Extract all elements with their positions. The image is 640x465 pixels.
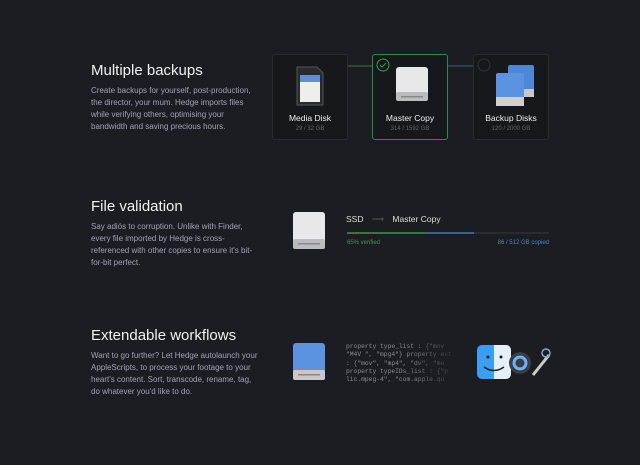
body text: Want to go further? Let Hedge autolaunch your AppleScripts, to process your footage to your heart's content. Sort, transcode, rename, tag, do whatever you'd like to do. <box>91 351 257 396</box>
section: multiple backups text <box>91 62 251 131</box>
transfer label: SSD ⟶ Master Copy <box>346 214 441 224</box>
icon: sd card <box>296 66 324 106</box>
transfer progress <box>346 214 549 246</box>
heading: File validation <box>91 198 183 215</box>
progress stats: 65% verified <box>347 240 380 246</box>
section: file validation text <box>91 198 252 267</box>
card: media disk <box>272 54 348 140</box>
heading: Extendable workflows <box>91 327 236 344</box>
card: master copy: 314 / 1592 GB <box>391 126 429 132</box>
icon: empty circle <box>478 58 490 72</box>
icon: blue drive <box>293 343 325 380</box>
icon: check <box>376 58 390 72</box>
icon: finder <box>477 345 511 379</box>
body text: Say adiós to corruption. Unlike with Finder, every file imported by Hedge is cross-referenced with other copies to ensure it's bit-for-bit perfect. <box>91 222 252 267</box>
icon: ssd drive <box>293 212 325 249</box>
card: media disk: Media Disk <box>289 113 331 123</box>
connector lines <box>348 66 473 67</box>
card: master copy <box>372 54 448 140</box>
heading: Multiple backups <box>91 62 203 79</box>
card: media disk: 29 / 32 GB <box>296 126 324 132</box>
icon: quicktime <box>509 352 531 374</box>
icon: drive <box>396 67 428 101</box>
card: master copy: Master Copy <box>386 113 434 123</box>
card: backup disks <box>473 54 549 140</box>
card: backup disks: Backup Disks <box>485 113 537 123</box>
progress bar <box>347 232 549 234</box>
body text: Create backups for yourself, post-production, the director, your mum. Hedge imports files while verifying others, optimising your bandwidth and saving precious hours. <box>91 86 251 131</box>
section: extendable workflows text <box>91 327 258 396</box>
transfer progress: 86 / 512 GB copied <box>498 240 549 246</box>
icons: apps <box>477 345 551 379</box>
card: backup disks: 120 / 2000 GB <box>492 126 530 132</box>
code snippet: property type_list : {"mov "M4V ", "mpg4"} property ext : {"mov", "mp4", "dv", "mo property typeIDs_list : {"p lic.mpeg-4", "com.apple.qu <box>346 343 452 383</box>
icon: drives <box>496 65 534 106</box>
icon: script editor <box>532 348 551 376</box>
